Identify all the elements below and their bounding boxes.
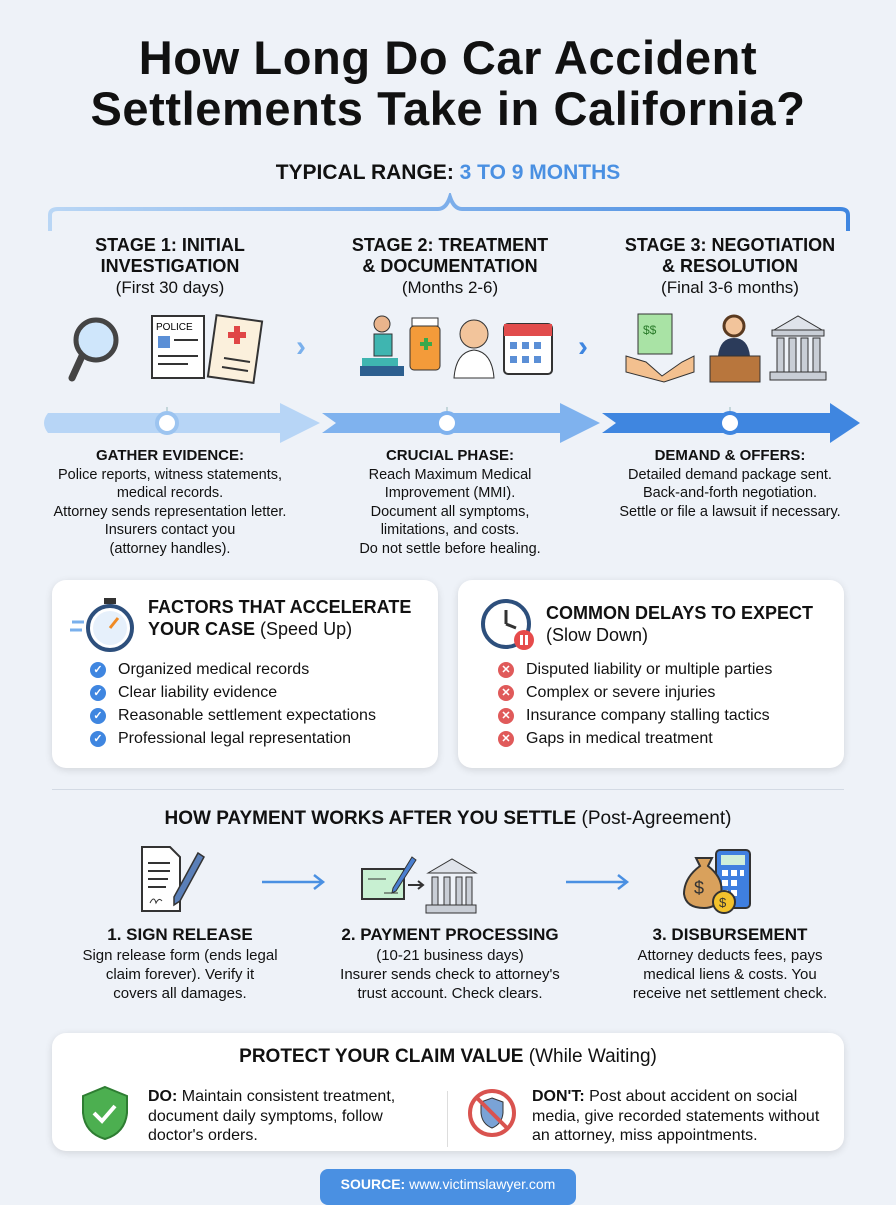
arrow	[566, 874, 629, 890]
stage 2 heading: (Months 2-6)	[402, 278, 498, 297]
step 3 text: 3. DISBURSEMENT	[653, 925, 807, 944]
arrow	[262, 874, 325, 890]
list: Disputed liability or multiple parties	[526, 661, 772, 678]
list: Insurance company stalling tactics	[526, 707, 770, 724]
title: Settlements Take in California?	[90, 82, 806, 135]
icons stage 3	[626, 314, 826, 382]
stage 1 heading: INVESTIGATION	[101, 256, 239, 276]
step 1 text: 1. SIGN RELEASE	[107, 925, 253, 944]
icons stage 3: $$	[643, 323, 657, 337]
list: ✓	[93, 710, 103, 722]
list	[498, 661, 772, 747]
step 3 text: Attorney deducts fees, pays	[637, 947, 823, 964]
stage 3 description: Detailed demand package sent.	[628, 466, 832, 482]
icons stage 1	[68, 314, 264, 384]
icon: shield check	[82, 1086, 128, 1140]
list: Complex or severe injuries	[526, 684, 715, 701]
list: Reasonable settlement expectations	[118, 707, 376, 724]
stage 2 description	[359, 447, 541, 556]
stage 3 heading: & RESOLUTION	[662, 256, 798, 276]
heading: FACTORS THAT ACCELERATE	[148, 597, 411, 617]
step 1 text: claim forever). Verify it	[106, 966, 254, 983]
icon: money bag calculator: $	[694, 878, 704, 898]
timeline	[44, 403, 860, 443]
list: Clear liability evidence	[118, 684, 277, 701]
list: ✓	[93, 686, 103, 698]
chevron 1: ›	[296, 330, 306, 363]
stage 2 heading	[352, 235, 548, 297]
list: Professional legal representation	[118, 730, 351, 747]
chevron 2: ›	[578, 330, 588, 363]
step 1 text	[82, 925, 278, 1002]
stage 2 heading: & DOCUMENTATION	[362, 256, 538, 276]
stage 1 description: medical records.	[117, 485, 223, 501]
stage 3 description: Back-and-forth negotiation.	[643, 485, 817, 501]
step 2 text	[340, 925, 560, 1002]
list: ✕	[501, 664, 511, 676]
do text: DO: Maintain consistent treatment, document daily symptoms, follow doctor's orders.	[148, 1088, 395, 1144]
title	[90, 31, 806, 135]
stage 1 description: (attorney handles).	[110, 540, 230, 556]
stage 1 heading	[95, 235, 245, 297]
stage 3 description: DEMAND & OFFERS:	[655, 447, 805, 464]
stage 3 heading: (Final 3-6 months)	[661, 278, 799, 297]
heading: PROTECT YOUR CLAIM VALUE (While Waiting)	[239, 1046, 657, 1067]
step 2 text: trust account. Check clears.	[357, 985, 543, 1002]
step 2 text: 2. PAYMENT PROCESSING	[341, 925, 559, 944]
stage 2 description: Improvement (MMI).	[385, 485, 515, 501]
stage 3 description	[619, 447, 841, 520]
title: How Long Do Car Accident	[139, 31, 757, 84]
icon: stopwatch	[70, 598, 134, 652]
stage 3 heading: STAGE 3: NEGOTIATION	[625, 235, 835, 255]
source: SOURCE: www.victimslawyer.com	[341, 1176, 555, 1192]
step 1 text: Sign release form (ends legal	[82, 947, 278, 964]
stage 1 description: GATHER EVIDENCE:	[96, 447, 244, 464]
stage 1 heading: (First 30 days)	[116, 278, 224, 297]
heading: (Slow Down)	[546, 625, 648, 645]
list: ✓	[93, 664, 103, 676]
list: ✕	[501, 710, 511, 722]
stage 2 description: Reach Maximum Medical	[369, 466, 531, 482]
step 3 text	[633, 925, 827, 1002]
typical range: TYPICAL RANGE: 3 TO 9 MONTHS	[276, 161, 620, 184]
list: ✓	[93, 732, 103, 744]
icons stage 2	[360, 316, 553, 378]
heading	[546, 603, 813, 645]
step 3 text: medical liens & costs. You	[643, 966, 817, 983]
list: Organized medical records	[118, 661, 309, 678]
list	[90, 661, 376, 747]
stage 3 heading	[625, 235, 835, 297]
list: ✕	[501, 686, 511, 698]
list: Gaps in medical treatment	[526, 730, 713, 747]
icon: no shield	[468, 1089, 516, 1137]
step 1 text: covers all damages.	[113, 985, 247, 1002]
dont text: DON'T: Post about accident on social media, give recorded statements without an attorney, miss appointments.	[532, 1088, 819, 1144]
stage 1 description: Attorney sends representation letter.	[54, 504, 286, 520]
source	[320, 1169, 576, 1205]
panel: delays	[458, 580, 844, 768]
icon: check to bank	[361, 856, 478, 914]
heading: YOUR CASE (Speed Up)	[148, 619, 352, 639]
heading: COMMON DELAYS TO EXPECT	[546, 603, 813, 623]
stage 1 description: Police reports, witness statements,	[58, 466, 282, 482]
stage 2 description: limitations, and costs.	[381, 522, 519, 538]
icon: clock	[481, 599, 534, 650]
stage 2 description: Do not settle before healing.	[359, 540, 541, 556]
stage 2 description: Document all symptoms,	[371, 504, 529, 520]
step 2 text: (10-21 business days)	[376, 947, 524, 964]
step 2 text: Insurer sends check to attorney's	[340, 966, 560, 983]
stage 2 heading: STAGE 2: TREATMENT	[352, 235, 548, 255]
icon: sign release	[141, 846, 205, 912]
payment heading: HOW PAYMENT WORKS AFTER YOU SETTLE (Post-Agreement)	[165, 808, 731, 829]
icons stage 1: POLICE	[156, 322, 193, 333]
stage 1 description	[54, 447, 286, 556]
panel: protect claim	[52, 1033, 844, 1151]
icon: money bag calculator: $	[719, 895, 727, 910]
panel: accelerate	[52, 580, 438, 768]
stage 3 description: Settle or file a lawsuit if necessary.	[619, 504, 841, 520]
stage 2 description: CRUCIAL PHASE:	[386, 447, 514, 464]
stage 1 heading: STAGE 1: INITIAL	[95, 235, 245, 255]
heading	[148, 597, 411, 639]
step 3 text: receive net settlement check.	[633, 985, 827, 1002]
icon: money bag calculator	[683, 849, 751, 914]
stage 1 description: Insurers contact you	[105, 522, 235, 538]
bracket	[48, 193, 850, 231]
list: ✕	[501, 732, 511, 744]
